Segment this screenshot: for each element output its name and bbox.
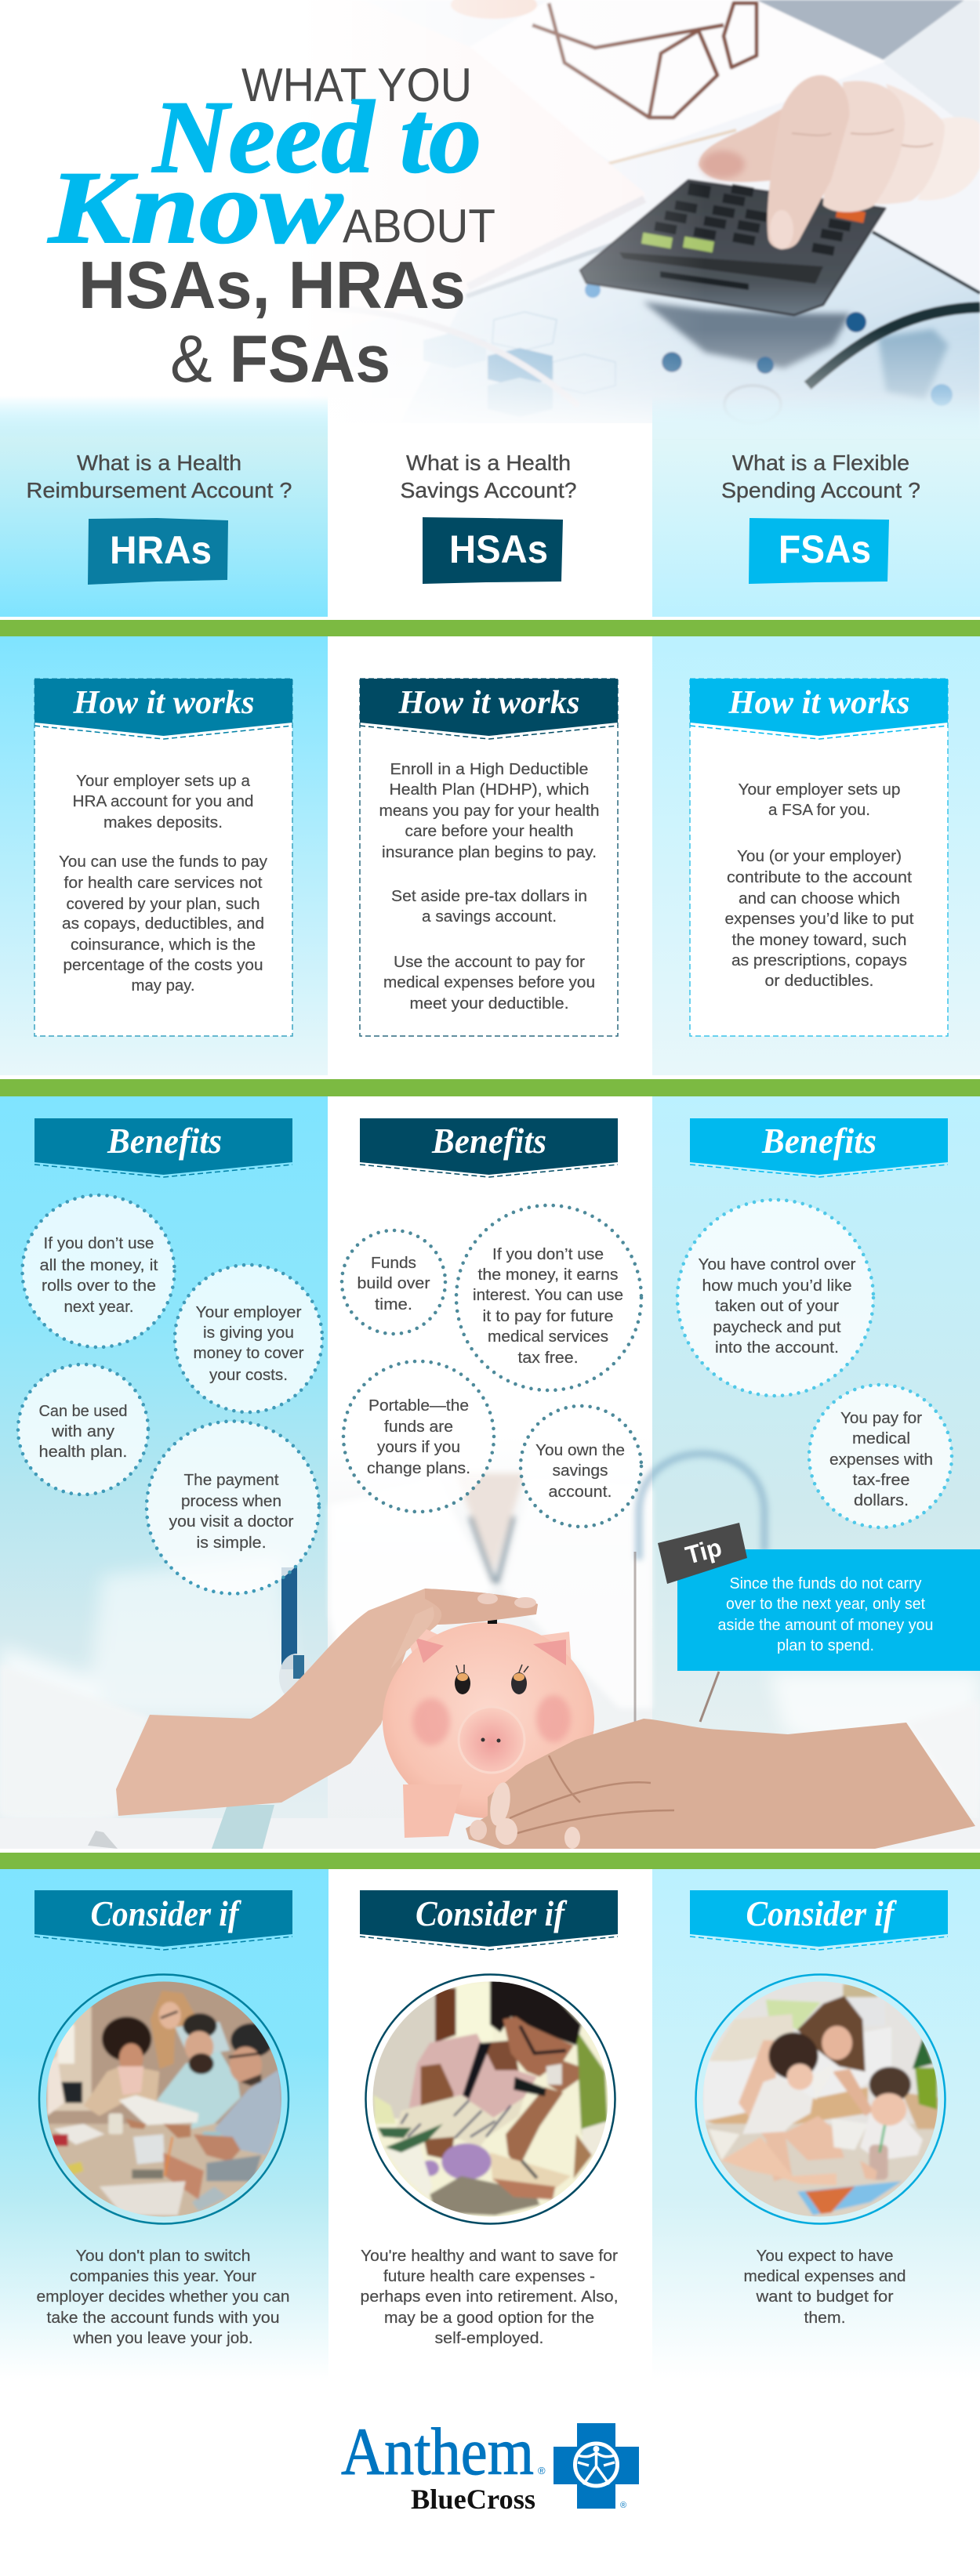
question: what is a health savings account: Savings Account? <box>400 478 577 502</box>
body text: want to budget for <box>755 2288 894 2306</box>
badge: FSAs: FSAs <box>779 527 871 571</box>
body text: them. <box>804 2309 845 2327</box>
body text: as copays, deductibles, and <box>62 915 264 933</box>
body text: means you pay for your health <box>379 802 599 820</box>
panel: HSA benefits <box>342 1118 641 1527</box>
bubble: earns interest: tax free. <box>517 1349 579 1367</box>
body text: a FSA for you. <box>768 801 870 819</box>
bubble: simple payment: you visit a doctor <box>169 1513 294 1531</box>
tip text: aside the amount of money you <box>718 1616 933 1634</box>
photo: mother and children on rug <box>695 1973 946 2225</box>
bubble: control <box>677 1200 873 1396</box>
body text: insurance plan begins to pay. <box>382 843 597 861</box>
body text: perhaps even into retirement. Also, <box>361 2288 618 2306</box>
badge: HRAs: HRAs <box>110 528 212 572</box>
body text: coinsurance, which is the <box>71 936 256 954</box>
body text <box>743 2247 906 2327</box>
question: what is a health savings account: What is a Health <box>406 451 571 475</box>
right hand <box>466 1719 975 1849</box>
body text: Your employer sets up a <box>76 772 251 790</box>
header ribbon: Benefits <box>431 1121 546 1161</box>
panel: FSA benefits <box>677 1118 952 1527</box>
bubble: employer money: money to cover <box>193 1344 304 1362</box>
bubble: control: You have control over <box>698 1255 856 1274</box>
header ribbon: How it works <box>728 685 909 721</box>
body text <box>361 2247 618 2347</box>
bubble: rolls over: next year. <box>64 1298 133 1316</box>
title: know script: Know <box>48 150 343 265</box>
photo: coworkers reviewing a document <box>38 1973 290 2225</box>
badge: HRAs <box>88 518 228 585</box>
bubble: rolls over <box>22 1195 174 1347</box>
body text: Health Plan (HDHP), which <box>389 781 590 799</box>
header ribbon: Consider if <box>746 1893 898 1933</box>
question: what is a health savings account <box>400 451 577 502</box>
header ribbon: Benefits <box>761 1121 877 1161</box>
bubble: earns interest: medical services <box>488 1328 608 1346</box>
body text: You can use the funds to pay <box>59 853 268 871</box>
bubble: funds build <box>342 1230 445 1334</box>
tip tag <box>658 1523 747 1584</box>
tip tag: Tip <box>682 1533 724 1570</box>
bubble: simple payment <box>147 1422 319 1594</box>
bubble: earns interest: If you don’t use <box>492 1245 604 1263</box>
bubble: tax-free <box>809 1385 952 1527</box>
body text: employer decides whether you can <box>36 2288 290 2306</box>
bubble: earns interest <box>456 1205 641 1390</box>
bubble: portable: Portable—the <box>368 1397 469 1415</box>
bubble: control: how much you’d like <box>702 1277 851 1295</box>
body text: may be a good option for the <box>384 2309 594 2327</box>
bubble: own the account: savings <box>552 1462 608 1480</box>
question: what is a health reimbursement account: Reimbursement Account ? <box>27 478 292 502</box>
question: what is a health reimbursement account <box>27 451 292 502</box>
bubble: tax-free: medical <box>852 1429 910 1447</box>
wordmark: Anthem <box>341 2414 534 2489</box>
logo: Anthem BlueCross <box>341 2414 639 2515</box>
bubble: earns interest: the money, it earns <box>478 1266 618 1284</box>
body text: Use the account to pay for <box>394 953 585 971</box>
badge: HSAs <box>423 517 563 584</box>
body text: companies this year. Your <box>70 2267 256 2285</box>
body text: expenses you’d like to put <box>724 910 914 928</box>
bubble: any health plan: health plan. <box>39 1443 127 1461</box>
tip text: over to the next year, only set <box>726 1595 925 1613</box>
body text: makes deposits. <box>103 813 223 831</box>
badge: FSAs <box>749 518 889 584</box>
bubble: own the account <box>521 1406 641 1527</box>
body text: take the account funds with you <box>47 2309 279 2327</box>
header ribbon: How it works <box>397 685 580 721</box>
column backgrounds: how it works <box>0 636 980 1075</box>
left hand fingertips over pig <box>425 1589 538 1625</box>
body text: and can choose which <box>739 889 900 908</box>
body text: You don't plan to switch <box>75 2247 251 2265</box>
tip text: plan to spend. <box>777 1636 874 1654</box>
badge: HSAs: HSAs <box>449 527 548 571</box>
benefits backdrop: doctor and piggy bank photo <box>0 1096 980 1853</box>
body text: when you leave your job. <box>72 2329 252 2347</box>
body text <box>724 781 914 990</box>
panel: HRA consider if <box>31 1890 298 2347</box>
panel: FSA how it works <box>690 679 948 1036</box>
body text: or deductibles. <box>765 972 873 990</box>
body text: future health care expenses - <box>383 2267 595 2285</box>
body text: medical expenses before you <box>383 973 595 991</box>
header ribbon <box>690 1890 948 1950</box>
body text: You (or your employer) <box>737 847 902 865</box>
body text: as prescriptions, copays <box>731 951 907 969</box>
title: what you: WHAT YOU <box>241 59 472 111</box>
bubble: funds build: Funds <box>371 1254 416 1272</box>
header ribbon: Consider if <box>416 1893 568 1933</box>
body text: medical expenses and <box>743 2267 906 2285</box>
body text <box>379 760 599 1013</box>
title: need to script: Need to <box>151 79 481 194</box>
title: about: ABOUT <box>343 200 495 252</box>
bubble: control: into the account. <box>715 1339 839 1357</box>
bubble: employer money: is giving you <box>203 1324 294 1342</box>
header ribbon: How it works <box>72 685 254 721</box>
bubble: tax-free: You pay for <box>840 1409 922 1427</box>
body text: You're healthy and want to save for <box>361 2247 618 2265</box>
body text <box>36 2247 290 2347</box>
hero photo: calculator, hand and glasses <box>0 0 980 439</box>
icon: blue cross with figure <box>554 2423 639 2510</box>
bubble: tax-free: expenses with <box>829 1451 933 1469</box>
bubble: rolls over: rolls over to the <box>42 1277 156 1295</box>
header ribbon <box>690 1118 948 1177</box>
bubble: rolls over: all the money, it <box>39 1256 158 1274</box>
header ribbon <box>360 1118 618 1177</box>
bubble: simple payment: The payment <box>183 1471 279 1489</box>
bubble: control: taken out of your <box>715 1297 839 1315</box>
bubble: any health plan <box>18 1364 148 1495</box>
body text: covered by your plan, such <box>66 895 260 913</box>
header ribbon: Benefits <box>107 1121 222 1161</box>
body text: the money toward, such <box>732 931 906 949</box>
body text: care before your health <box>405 822 574 840</box>
panel: HSA how it works <box>360 679 618 1036</box>
bubble: employer money: Your employer <box>196 1303 302 1321</box>
title: HSAs, HRAs: HSAs, HRAs <box>78 248 466 323</box>
header ribbon <box>690 679 948 739</box>
bubble: portable: yours if you <box>377 1438 460 1456</box>
column backgrounds: consider if <box>0 1869 980 2379</box>
tip text: Since the funds do not carry <box>729 1574 922 1592</box>
header ribbon <box>34 679 292 739</box>
bubble: funds build: build over <box>358 1274 430 1292</box>
photo: florist on the phone <box>365 1973 616 2225</box>
bubble: employer money: your costs. <box>209 1366 288 1384</box>
body text: Your employer sets up <box>739 781 900 799</box>
bubble: rolls over: If you don’t use <box>44 1234 154 1252</box>
icon: blue cross with figure: ® <box>620 2501 626 2510</box>
bubble: simple payment: process when <box>181 1492 281 1510</box>
bubble: earns interest: it to pay for future <box>483 1307 613 1325</box>
bubble: any health plan: Can be used <box>39 1402 127 1420</box>
question: what is a flexible spending account <box>721 451 920 502</box>
panel: HRA benefits <box>18 1118 322 1594</box>
header ribbon <box>360 679 618 739</box>
left hand <box>116 1589 538 1816</box>
body text: may pay. <box>132 976 194 995</box>
bubble: earns interest: interest. You can use <box>473 1286 623 1304</box>
callout: tip <box>658 1523 980 1671</box>
header ribbon <box>34 1890 292 1950</box>
tip text <box>718 1574 933 1654</box>
body text: Enroll in a High Deductible <box>390 760 588 778</box>
body text: meet your deductible. <box>409 995 569 1013</box>
piggy bank <box>383 1619 594 1838</box>
body text: HRA account for you and <box>72 792 254 810</box>
body text: You expect to have <box>756 2247 894 2265</box>
body text: self-employed. <box>434 2329 544 2347</box>
question: what is a health reimbursement account: What is a Health <box>77 451 241 475</box>
header ribbon <box>360 1890 618 1950</box>
bubble: simple payment: is simple. <box>196 1534 267 1552</box>
title <box>48 59 495 397</box>
bubble: own the account: You own the <box>535 1441 625 1459</box>
bubble: funds build: time. <box>375 1295 412 1313</box>
bubble: portable: change plans. <box>367 1459 470 1477</box>
panel: FSA consider if <box>688 1890 954 2327</box>
bubble: own the account: account. <box>549 1483 612 1501</box>
wordmark: BlueCross <box>411 2484 535 2515</box>
wordmark: ® <box>538 2465 546 2476</box>
bubble: control: paycheck and put <box>713 1318 841 1336</box>
body text: a savings account. <box>422 908 557 926</box>
bubble: tax-free: tax-free <box>853 1471 909 1489</box>
title: and FSAs: & FSAs <box>170 322 390 397</box>
bubble: portable <box>343 1361 494 1512</box>
question: what is a flexible spending account: What is a Flexible <box>732 451 909 475</box>
bubble: employer money <box>175 1265 322 1412</box>
body text: percentage of the costs you <box>63 956 263 974</box>
header ribbon: Consider if <box>91 1893 242 1933</box>
body text: contribute to the account <box>727 868 912 886</box>
body text <box>59 772 268 995</box>
panel: HSA consider if <box>357 1890 623 2347</box>
panel: HRA how it works <box>34 679 292 1036</box>
body text: Set aside pre-tax dollars in <box>391 887 587 905</box>
body text: for health care services not <box>64 874 263 892</box>
header ribbon <box>34 1118 292 1177</box>
bubble: tax-free: dollars. <box>854 1491 909 1509</box>
bubble: portable: funds are <box>384 1418 453 1436</box>
question: what is a flexible spending account: Spending Account ? <box>721 478 920 502</box>
bubble: any health plan: with any <box>51 1422 115 1440</box>
column backgrounds: what is section <box>0 396 980 617</box>
